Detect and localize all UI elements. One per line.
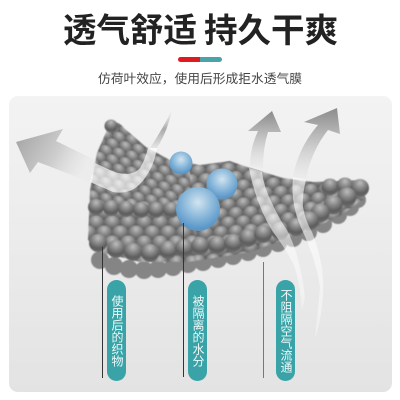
label: fabric <box>107 280 126 381</box>
title: 透气舒适 <box>63 13 197 50</box>
air band: right flow across fabric <box>292 177 323 338</box>
arrow: tail of left air flow <box>150 110 172 148</box>
droplet: medium <box>206 168 238 200</box>
label: air: 不阻隔空气流通 <box>279 288 293 372</box>
label: fabric: 使用后的织物 <box>110 294 124 366</box>
label: air <box>276 280 295 381</box>
leader line: air <box>262 262 264 378</box>
label: water: 被隔离的水分 <box>191 294 205 366</box>
droplet: small <box>170 152 192 174</box>
title <box>63 13 338 50</box>
label: water <box>188 280 207 381</box>
illustration: fabric, arrows and droplets <box>16 108 370 378</box>
leader line: water <box>182 223 184 377</box>
droplet: large <box>176 187 220 231</box>
accent bar <box>178 57 222 62</box>
air band: left flow across fabric <box>90 148 157 193</box>
fabric: shadow layer <box>91 192 366 279</box>
leader line: fabric <box>102 247 104 378</box>
air band: middle flow across fabric <box>249 168 305 310</box>
arrow: middle air arrow <box>248 111 281 168</box>
title: 持久干爽 <box>204 13 338 50</box>
subtitle: 仿荷叶效应，使用后形成拒水透气膜 <box>98 71 302 86</box>
arrow: right air arrow <box>293 108 340 178</box>
fabric: woven spheres <box>87 119 370 263</box>
arrow: left air arrow <box>16 129 95 182</box>
panel: illustration background <box>9 96 392 392</box>
